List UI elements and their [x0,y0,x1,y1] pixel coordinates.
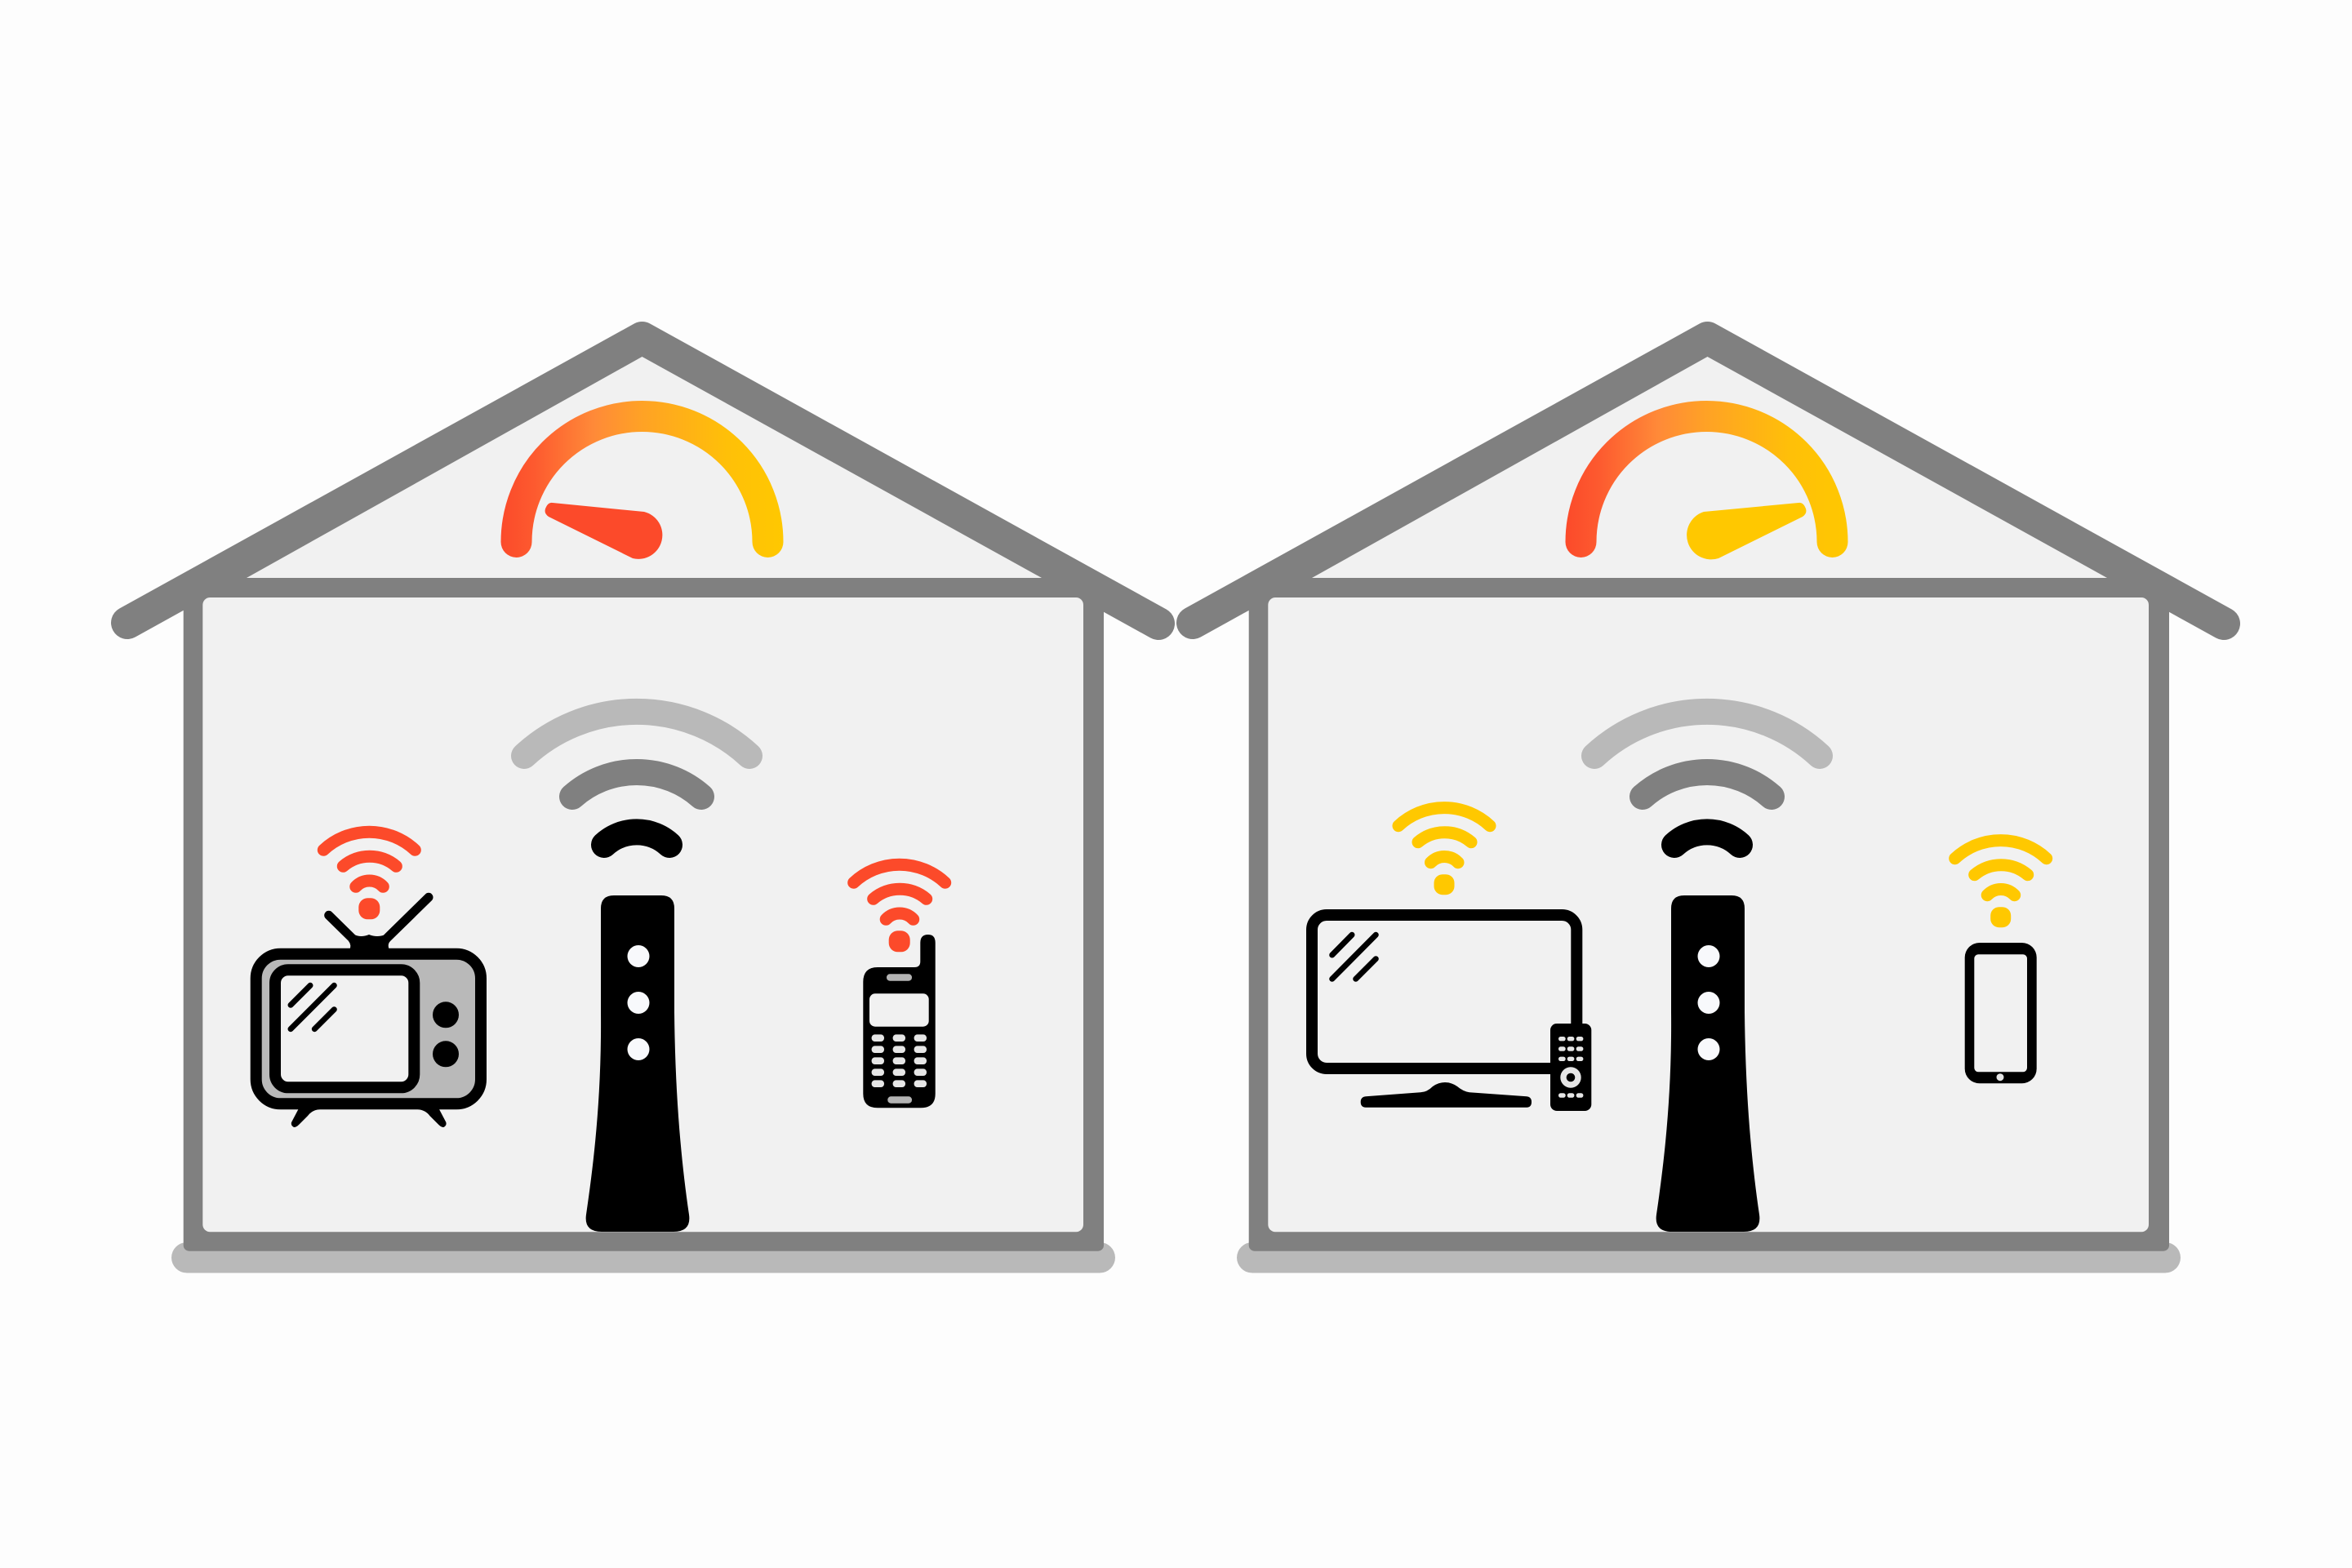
speed gauge: slow [516,416,767,559]
icon: remote control [1550,1024,1591,1111]
router with wifi waves: left [524,712,749,1232]
router with wifi waves: right [1594,712,1820,1232]
icon: smartphone with yellow wifi [1955,841,2047,1083]
icon: red wifi above tv [323,832,415,919]
icon: red wifi above phone [854,864,945,952]
icon: yellow wifi above tv [1398,808,1490,895]
gauge needle pointing to slow [545,503,662,559]
house structure: left [127,338,1158,1273]
icon: flat tv with remote and yellow wifi [1312,808,1591,1111]
panel: right house, fast connection [1193,338,2224,1273]
icon: old mobile phone with red wifi [854,864,945,1108]
house structure: right [1193,338,2224,1273]
icon: yellow wifi above smartphone [1955,841,2047,927]
panel: left house, slow connection [127,338,1158,1273]
gauge needle pointing to fast [1687,503,1806,559]
icon: retro tv with red wifi [256,832,481,1127]
speed gauge: fast [1581,416,1832,559]
